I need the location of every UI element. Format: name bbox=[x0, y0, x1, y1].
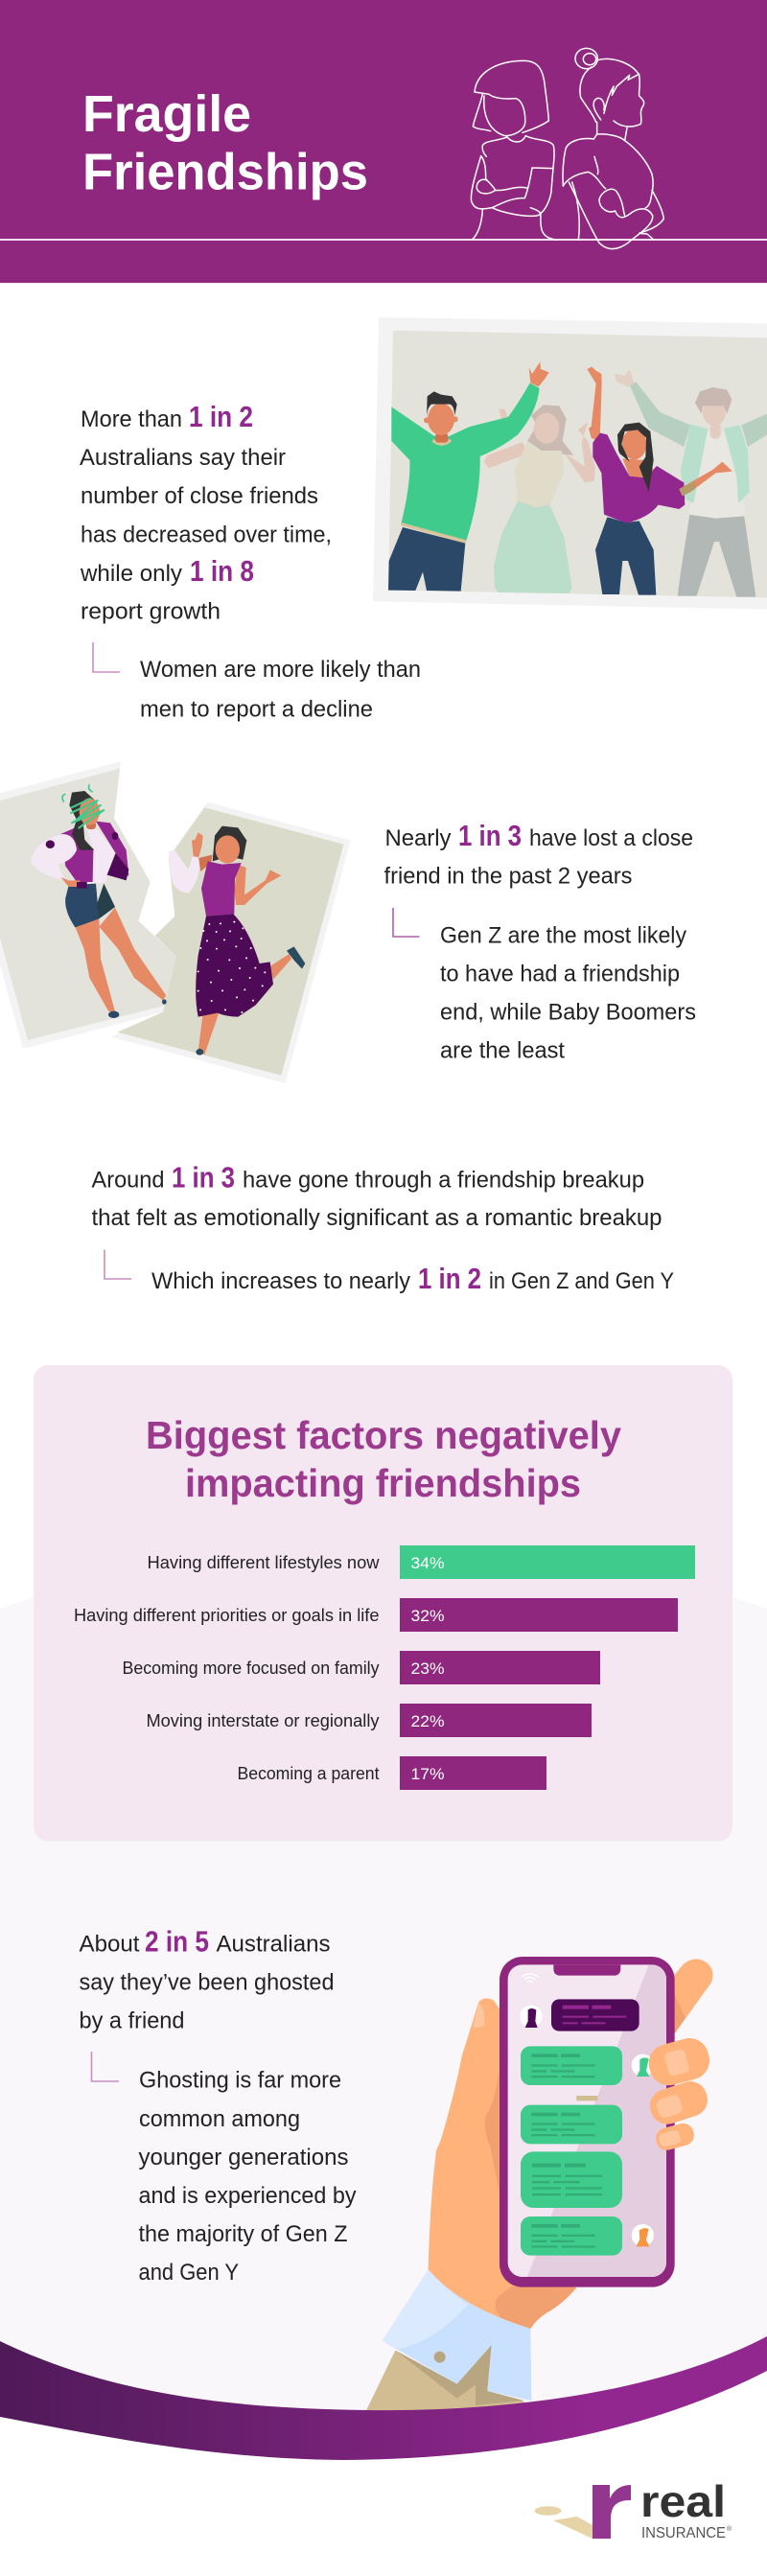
title: Friendships bbox=[82, 144, 368, 201]
sub text: Gen Z and Gen Y bbox=[151, 1262, 674, 1295]
logo: Real Insurance bbox=[535, 2476, 732, 2541]
sub text: younger generations: the majority of Gen Z bbox=[138, 2221, 347, 2247]
sub text: Gen Z and Gen Y: Which increases to nearly bbox=[151, 1268, 410, 1294]
text block: 1 in 2 Australians: while only bbox=[80, 561, 182, 587]
text block: ghosted: Australians bbox=[217, 1931, 330, 1958]
text block: ghosted: say they’ve been ghosted bbox=[79, 1969, 334, 1996]
text block: 1 in 2 Australians: report growth bbox=[81, 598, 221, 625]
icon: two friends line art bbox=[471, 48, 663, 249]
bar chart: Having different lifestyles now bbox=[148, 1553, 381, 1572]
text block: 1 in 3 lost a friend: Nearly bbox=[385, 825, 451, 851]
text block: emotionally significant: have gone through a friendship breakup bbox=[243, 1168, 644, 1193]
bar chart: 17% bbox=[410, 1765, 445, 1783]
panel heading: impacting friendships bbox=[185, 1461, 581, 1505]
sub text: younger generations bbox=[138, 2067, 357, 2286]
sub text: women decline: men to report a decline bbox=[140, 696, 373, 723]
sub text: Gen Z and Gen Y: 1 in 2 bbox=[418, 1262, 481, 1295]
text block: 1 in 2 Australians: Australians say their bbox=[80, 445, 286, 471]
sub text: women decline: Women are more likely than bbox=[140, 657, 421, 683]
sub text: younger generations: common among bbox=[139, 2106, 300, 2132]
text block: 1 in 3 lost a friend: friend in the past 2 years bbox=[384, 863, 633, 890]
bar chart: Becoming a parent bbox=[238, 1764, 380, 1783]
sub text: Gen Z: to have had a friendship bbox=[440, 961, 680, 987]
text block: 1 in 3 lost a friend bbox=[384, 819, 693, 890]
sub text: younger generations: and Gen Y bbox=[138, 2260, 239, 2286]
text block: 1 in 2 Australians: number of close friends bbox=[81, 483, 318, 509]
sub text: Gen Z and Gen Y: in Gen Z and Gen Y bbox=[489, 1268, 674, 1294]
text block: 1 in 2 Australians: More than bbox=[81, 406, 182, 432]
sub text: Gen Z: are the least bbox=[440, 1037, 565, 1064]
text block: 1 in 3 lost a friend: 1 in 3 bbox=[458, 819, 522, 852]
text block: emotionally significant: that felt as emotionally significant as a romantic breakup bbox=[92, 1205, 662, 1231]
bar chart: 32% bbox=[410, 1607, 445, 1625]
text block: emotionally significant: Around bbox=[92, 1168, 165, 1193]
logo: Real Insurance: ® bbox=[727, 2525, 732, 2533]
bar chart: 22% bbox=[410, 1712, 445, 1730]
bracket arrow 4 bbox=[92, 2052, 119, 2081]
text block: ghosted: 2 in 5 bbox=[145, 1925, 209, 1958]
title bbox=[82, 85, 368, 201]
bar chart: Moving interstate or regionally bbox=[146, 1711, 380, 1730]
text block: emotionally significant: 1 in 3 bbox=[172, 1160, 235, 1195]
sub text: younger generations: Ghosting is far more bbox=[139, 2067, 341, 2094]
background dome bbox=[0, 1543, 767, 2410]
logo: Real Insurance: real bbox=[640, 2476, 726, 2526]
sub text: younger generations: and is experienced by bbox=[138, 2183, 357, 2209]
bar chart bbox=[74, 1545, 695, 1790]
title: Fragile bbox=[82, 85, 251, 143]
logo: Real Insurance: INSURANCE bbox=[641, 2525, 726, 2541]
text block: 1 in 2 Australians: 1 in 8 bbox=[190, 554, 254, 588]
bracket arrow 1 bbox=[93, 642, 120, 672]
panel heading bbox=[146, 1413, 621, 1505]
panel: biggest factors bbox=[34, 1365, 732, 1841]
text block: 1 in 2 Australians bbox=[80, 400, 332, 625]
header banner bbox=[0, 0, 767, 283]
sub text: women decline bbox=[140, 657, 421, 723]
text block: ghosted: by a friend bbox=[79, 2007, 184, 2034]
photo: group of friends bbox=[373, 317, 767, 610]
sub text: Gen Z: Gen Z are the most likely bbox=[440, 922, 686, 949]
bar chart: 23% bbox=[410, 1659, 445, 1678]
text block: 1 in 2 Australians: 1 in 2 bbox=[189, 400, 253, 433]
bar chart: 34% bbox=[410, 1554, 445, 1572]
sub text: Gen Z: end, while Baby Boomers bbox=[440, 999, 696, 1026]
text block: ghosted: About bbox=[79, 1931, 140, 1958]
text block: 1 in 2 Australians: has decreased over time, bbox=[81, 522, 332, 548]
bar chart: Becoming more focused on family bbox=[123, 1659, 380, 1678]
text block: emotionally significant bbox=[92, 1160, 662, 1231]
illustration: hand holding phone bbox=[366, 1957, 714, 2416]
bracket arrow 3 bbox=[105, 1250, 131, 1279]
sub text: younger generations: younger generations bbox=[138, 2145, 349, 2170]
text block: ghosted bbox=[79, 1925, 334, 2034]
panel heading: Biggest factors negatively bbox=[146, 1413, 621, 1457]
photo: torn friends bbox=[0, 761, 351, 1083]
bracket arrow 2 bbox=[393, 908, 420, 937]
text block: 1 in 3 lost a friend: have lost a close bbox=[529, 825, 693, 851]
sub text: Gen Z bbox=[440, 922, 696, 1064]
purple swoosh bbox=[0, 2336, 767, 2460]
bar chart: Having different priorities or goals in life bbox=[74, 1606, 380, 1625]
